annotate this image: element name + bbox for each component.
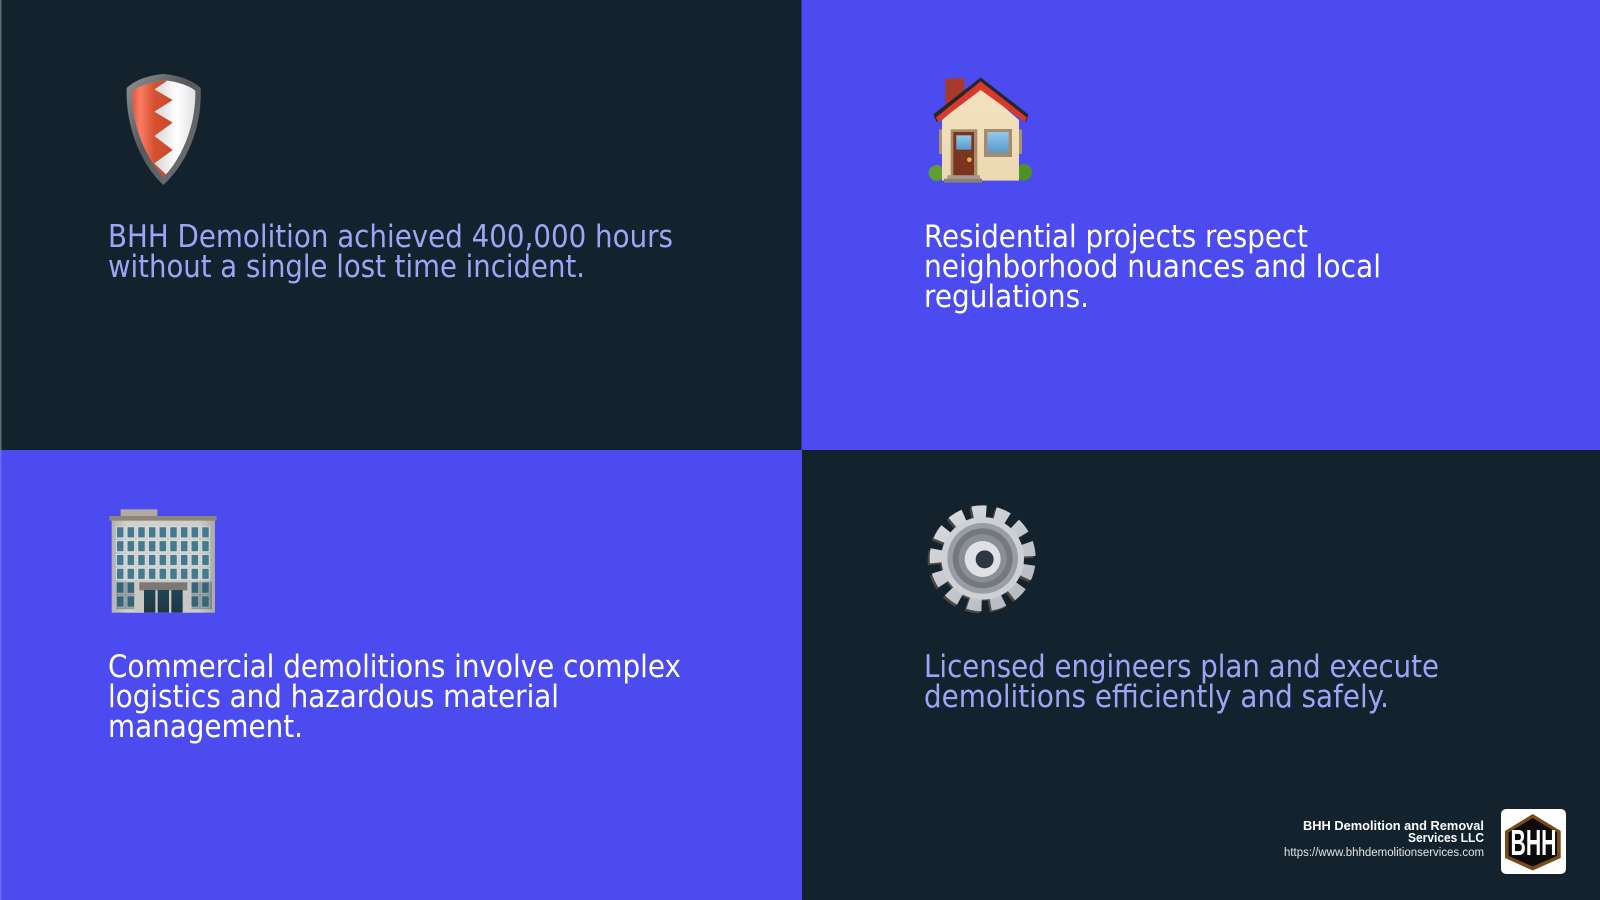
text: residential statement: neighborhood nuances and local [924,249,1381,285]
text: commercial statement [108,649,681,745]
company name and url: Services LLC [1408,830,1485,845]
company footer [1284,809,1566,874]
text: engineers statement: demolitions efficiently and safely. [924,679,1389,715]
text: commercial statement: logistics and hazardous material [108,679,559,715]
icon: house [929,77,1032,183]
company name and url: https://www.bhhdemolitionservices.com [1284,847,1484,859]
icon: office building [109,509,217,613]
panel: safety record [0,0,802,450]
text: safety statement: BHH Demolition achieved 400,000 hours [108,219,673,255]
text: residential statement: Residential projects respect [924,219,1308,255]
company name and url [1284,818,1485,859]
logo: BHH badge: BHH [1510,822,1556,863]
text: residential statement [924,219,1381,315]
text: commercial statement: Commercial demolitions involve complex [108,649,681,685]
icon: shield [127,74,201,185]
text: safety statement [108,219,673,285]
panel: residential projects [802,0,1600,450]
text: commercial statement: management. [108,709,303,745]
text: residential statement: regulations. [924,279,1089,315]
panel: commercial demolitions [0,450,802,900]
logo: BHH badge [1501,809,1566,874]
icon: gear [929,506,1035,612]
text: engineers statement: Licensed engineers plan and execute [924,649,1439,685]
panel: licensed engineers [802,450,1600,900]
text: safety statement: without a single lost time incident. [108,249,585,285]
company name and url: BHH Demolition and Removal [1303,818,1484,833]
text: engineers statement [924,649,1439,715]
